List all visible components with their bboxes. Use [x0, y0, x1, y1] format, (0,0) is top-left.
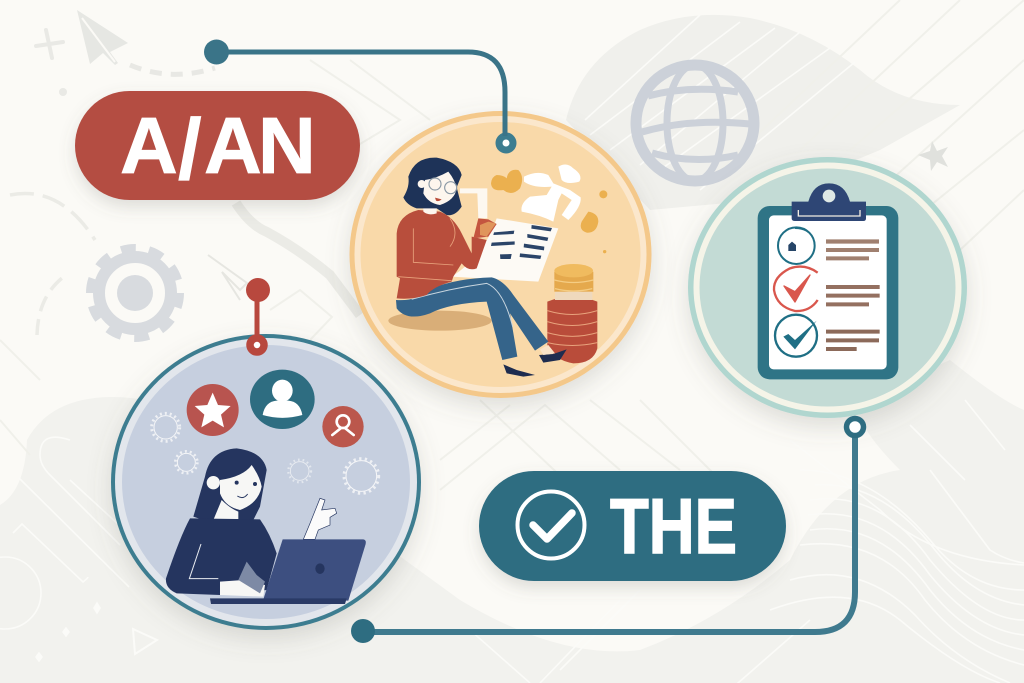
icon: check circle: [518, 492, 584, 558]
icon: star badge: [187, 384, 239, 436]
panel: laptop user circle: [111, 334, 421, 630]
connector: top line to reader: [204, 40, 505, 136]
sweater: [166, 518, 277, 595]
connector: red stem to laptop user: [246, 278, 270, 338]
badge: A/AN: [75, 91, 360, 200]
panel: reader circle: [350, 111, 652, 398]
clip: [792, 183, 866, 221]
icon: ribbon badge: [322, 406, 364, 447]
icon: paper plane: [10, 10, 215, 335]
badge: THE: [479, 471, 786, 581]
badge label: THE: THE: [610, 482, 737, 570]
connector ring: reader: [499, 136, 513, 150]
face: [220, 465, 262, 510]
badge label: A/AN: /: [178, 102, 202, 198]
face: [423, 172, 457, 205]
raised hand: [303, 498, 337, 539]
icon: clipboard: [758, 183, 898, 379]
glasses: [429, 178, 457, 194]
hand on keyboard: [220, 580, 265, 597]
shoes: [503, 349, 567, 377]
badge label: A/AN: A: [120, 101, 178, 190]
panel: checklist circle: [688, 157, 967, 418]
check row 3: [775, 315, 880, 357]
neck: [423, 203, 437, 214]
icon: person badge: [250, 370, 315, 429]
icon: globe: [636, 65, 754, 181]
illustration: woman at laptop with icons: [152, 370, 379, 604]
check row 1: [778, 227, 879, 264]
check row 2: [774, 267, 880, 311]
document: [452, 218, 558, 282]
decorative gear outlines: [152, 413, 379, 493]
icon: small arrow outline: [208, 255, 247, 300]
sweater: [397, 210, 487, 299]
hand and phone: [460, 188, 487, 218]
floating shapes: [491, 165, 607, 253]
icon: gear: [91, 249, 179, 337]
connector: checklist to bottom dot: [351, 418, 864, 643]
coin stack: [547, 264, 597, 363]
badge label: A/AN: A: [204, 101, 262, 190]
badge label: A/AN: N: [258, 101, 316, 190]
hair: [403, 158, 462, 215]
hair: [193, 448, 267, 523]
icon: laptop: [210, 539, 366, 604]
jeans: [396, 277, 548, 360]
icon: star: [918, 141, 948, 171]
connector ring: laptop user: [250, 338, 264, 352]
illustration: woman reading with coins: [388, 158, 607, 377]
